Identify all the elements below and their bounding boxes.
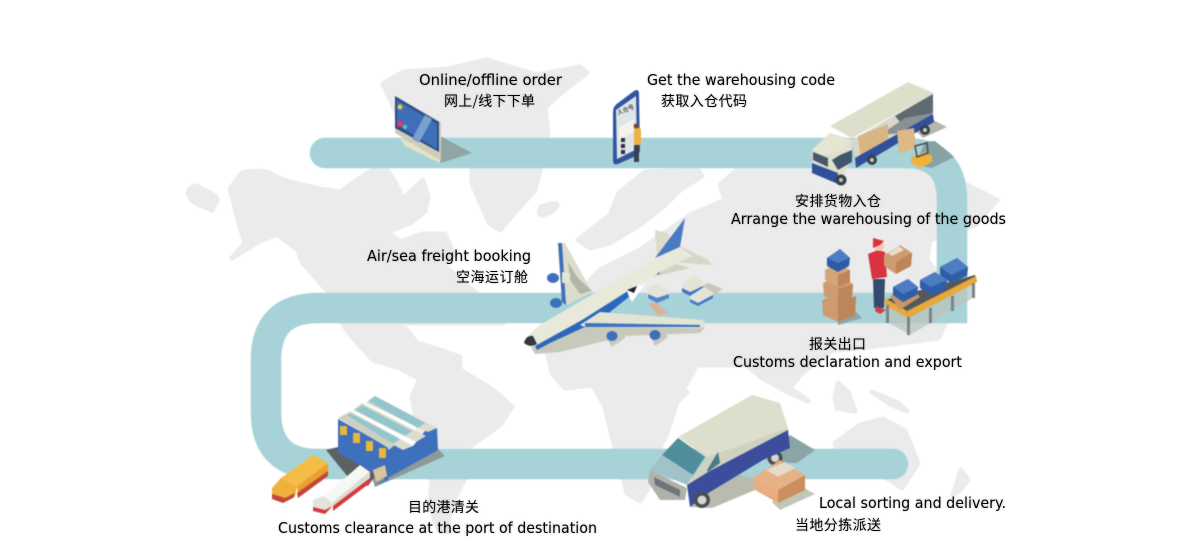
icon: computer monitor	[395, 96, 472, 163]
label: arrange warehousing	[731, 191, 1006, 228]
label: arrange warehousing: Arrange the warehousing of the goods	[731, 210, 1006, 228]
label: customs declaration	[733, 334, 962, 371]
label: warehousing code: Get the warehousing code	[647, 71, 835, 89]
route band	[266, 153, 952, 464]
step labels	[278, 71, 1006, 537]
label: online/offline order: Online/offline order	[419, 71, 563, 89]
icon: worker with parcels and conveyor	[822, 238, 977, 335]
label: online/offline order: 网上/线下下单	[444, 91, 535, 111]
label: arrange warehousing: 安排货物入仓	[795, 191, 881, 211]
icon: phone with person: 人仓号	[615, 102, 635, 117]
label: customs declaration: Customs declaration and export	[733, 353, 962, 371]
label: customs clearance	[278, 497, 597, 537]
world map background	[188, 60, 997, 531]
label: local delivery	[795, 494, 1006, 535]
label: local delivery: 当地分拣派送	[795, 515, 881, 535]
label: freight booking: 空海运订舱	[456, 267, 528, 287]
icon: phone with person	[613, 90, 641, 164]
label: warehousing code: 获取入仓代码	[661, 91, 747, 111]
label: warehousing code	[647, 71, 835, 111]
label: customs clearance: 目的港清关	[408, 497, 479, 517]
label: local delivery: Local sorting and delivery.	[819, 494, 1006, 512]
icon: delivery van and parcel	[648, 395, 815, 510]
label: online/offline order	[419, 71, 563, 111]
label: customs declaration: 报关出口	[809, 334, 866, 354]
icon: warehouse with trucks	[272, 396, 445, 514]
icon: airplane with cargo	[524, 218, 723, 354]
label: freight booking: Air/sea freight booking	[367, 247, 531, 265]
icon: truck with forklift	[812, 82, 954, 186]
label: freight booking	[367, 247, 531, 287]
label: customs clearance: Customs clearance at the port of destination	[278, 519, 597, 537]
